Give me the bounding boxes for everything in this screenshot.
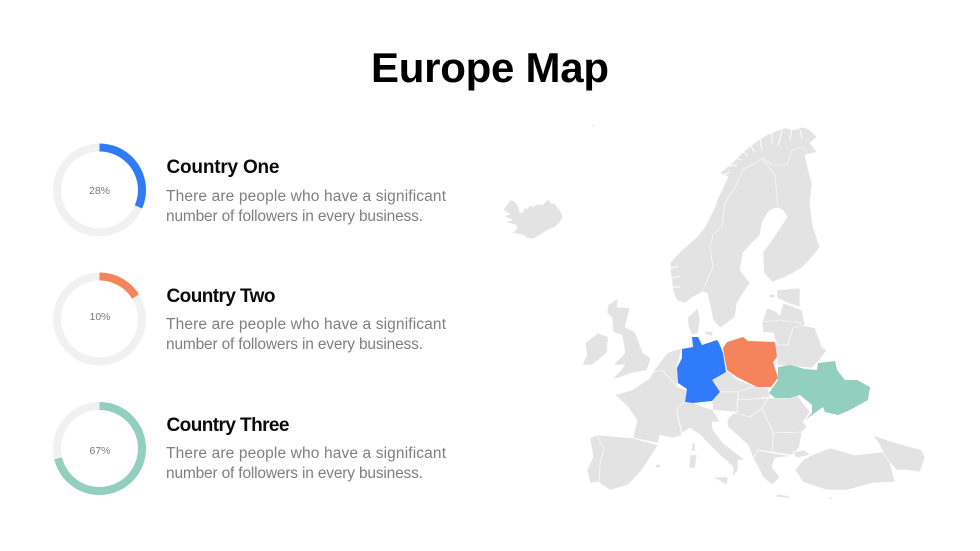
text block: country one [166,188,447,225]
donut chart: 10% [57,276,142,362]
panel: country three [57,406,447,491]
text block: country three [166,445,447,482]
Germany highlighted in blue [677,337,726,403]
heading: country three: Country Three [166,415,290,436]
heading: country one: Country One [166,157,280,178]
map of Europe [503,124,925,499]
text block: country two: number of followers in every business. [166,336,423,353]
Poland highlighted in orange [723,337,778,387]
panel: country one [57,148,447,232]
donut chart: 10%: 10% [89,311,111,323]
text block: country two [166,316,447,353]
text block: country three: There are people who have a significant [166,445,447,462]
donut chart: 67%: 67% [89,445,111,457]
heading: country two: Country Two [166,286,276,307]
grey countries [503,124,925,499]
text block: country one: number of followers in every business. [166,208,423,225]
donut chart: 67% [57,406,142,491]
donut chart: 28% [57,148,142,232]
Ukraine highlighted in teal [769,361,870,420]
text block: country three: number of followers in every business. [166,465,423,482]
text block: country one: There are people who have a significant [166,188,447,205]
donut chart: 28%: 28% [89,185,110,197]
panel: country two [57,276,447,362]
title: Europe Map [371,44,609,91]
text block: country two: There are people who have a significant [166,316,447,333]
